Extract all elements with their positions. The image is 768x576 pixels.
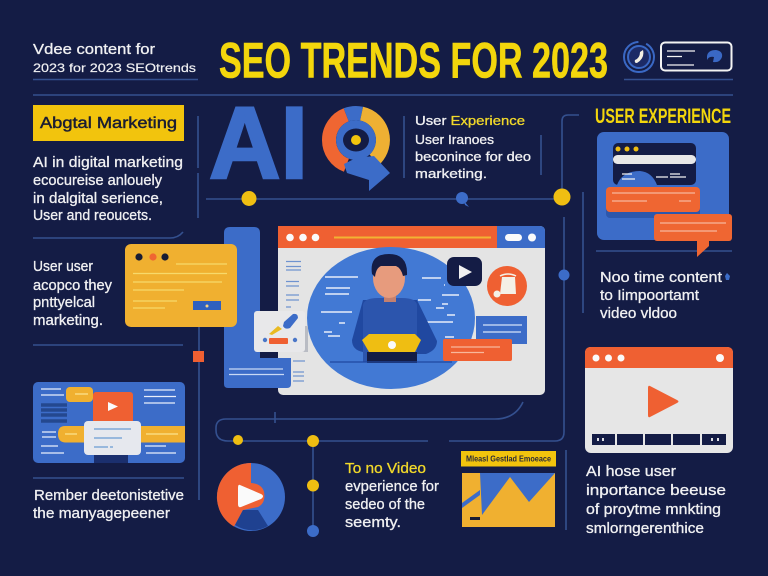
icons: phone and message card <box>624 42 732 72</box>
text block: video experience: sedeo of the <box>345 497 425 513</box>
text block: AI in digital marketing <box>33 155 183 224</box>
lower sidebar panel <box>224 358 291 388</box>
pencil card <box>254 311 308 352</box>
text block: user experience <box>415 113 531 181</box>
text block: video content: video vldoo <box>600 306 677 322</box>
timeline dots <box>242 188 570 280</box>
yellow browser card <box>125 244 237 327</box>
text block: video content: to Iimpoortamt <box>600 288 699 304</box>
blue video illustration <box>33 382 185 463</box>
subtitle text block: 2023 for 2023 SEOtrends <box>33 61 196 75</box>
text block: user physical marketing: pnttyelcal <box>33 295 95 311</box>
text block: user physical marketing: User user <box>33 259 93 275</box>
text block: user experience: User Experience <box>415 113 525 128</box>
text block: user physical marketing <box>33 259 113 329</box>
text block: user experience: marketing. <box>415 166 487 181</box>
panel: user experience illustration <box>597 132 732 257</box>
video player illustration <box>585 347 733 453</box>
pie chart with play icon <box>217 463 285 531</box>
play badge <box>447 257 482 286</box>
text block: video experience: evperience for <box>345 479 439 495</box>
icon: message card <box>661 42 732 70</box>
text block: video experience <box>345 461 439 531</box>
text block: AI in digital marketing: in dalgital serience, <box>33 191 163 207</box>
browser window <box>278 226 545 395</box>
icon: phone circle <box>624 42 654 72</box>
text block: user experience: User Iranoes <box>415 132 495 147</box>
text block: AI in digital marketing: User and reoucets. <box>33 208 152 224</box>
text block: remember <box>33 487 184 522</box>
text block: video experience: To no Video <box>345 461 426 477</box>
subtitle text block <box>33 42 196 75</box>
area chart <box>462 473 555 527</box>
text block: AI importance <box>586 464 726 537</box>
text block: AI importance: smlorngerenthice <box>586 521 704 537</box>
orange note <box>443 339 512 361</box>
text block: user experience: beconince for deo <box>415 149 531 164</box>
text block: remember: Rember deetonistetive <box>34 487 184 504</box>
text block: AI importance: of proytme mnkting <box>586 502 721 518</box>
AI lettering: AI <box>209 86 308 200</box>
text block: video content <box>600 270 730 322</box>
person <box>330 254 452 363</box>
icon: AI magnifier ring <box>329 113 390 191</box>
text block: user physical marketing: marketing. <box>33 313 103 329</box>
illustration circle <box>307 247 475 389</box>
text block: user physical marketing: acopco they <box>33 278 113 294</box>
text block: AI in digital marketing: ecocureise anlouely <box>33 173 163 189</box>
badge: digital marketing: Abgtal Marketing <box>40 115 177 132</box>
text block: video content: Noo time content <box>600 270 722 286</box>
subtitle text block: Vdee content for <box>33 42 155 58</box>
connector node <box>193 351 204 362</box>
badge: digital marketing <box>33 105 184 141</box>
music icon <box>487 266 527 306</box>
text block: remember: the manyagepeener <box>33 505 170 522</box>
text block: AI importance: inportance beeuse <box>586 483 726 499</box>
text block: video experience: seemty. <box>345 515 401 531</box>
chart label: Mleasl Gestlad Emoeace <box>466 454 551 464</box>
text block: AI importance: AI hose user <box>586 464 676 480</box>
blue sidebar panel <box>224 227 260 358</box>
lower timeline dots <box>233 435 319 537</box>
blue note <box>476 316 527 344</box>
chart label <box>461 451 556 466</box>
text block: AI in digital marketing: AI in digital marketing <box>33 155 183 171</box>
